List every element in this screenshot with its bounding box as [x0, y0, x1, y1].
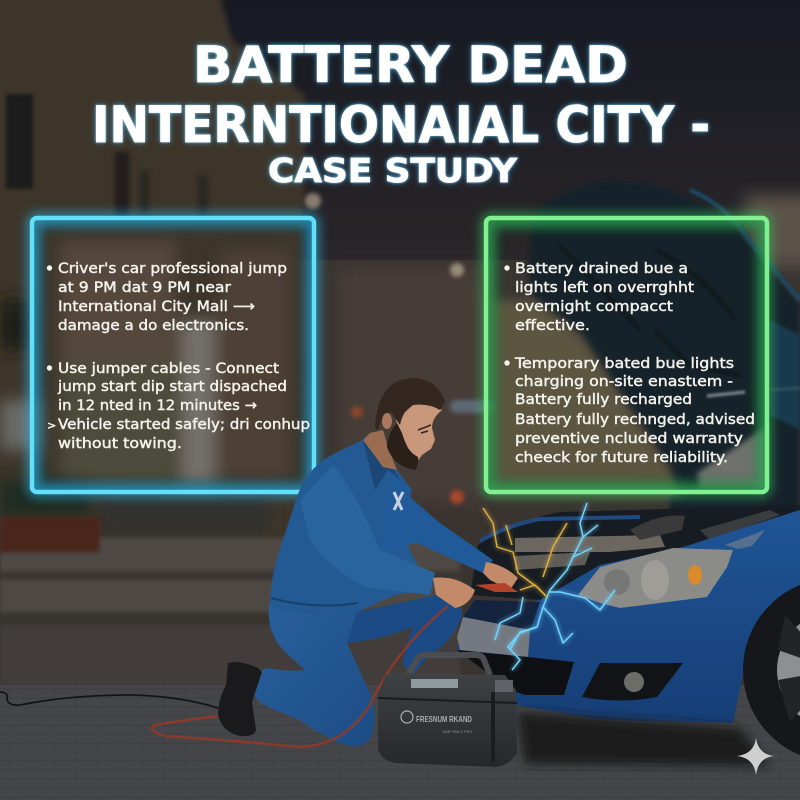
brand subtext: JUMP MULTI PRO [442, 729, 472, 734]
bumper top band [463, 600, 540, 630]
wrench badge [394, 492, 403, 510]
blue lightning [495, 503, 615, 670]
red jumper cable and clamp [152, 583, 518, 747]
bullet text: breakdown: International City Mall ⟶ [58, 299, 255, 315]
collar [363, 436, 400, 490]
boot [218, 662, 262, 736]
engine bay [470, 505, 800, 600]
bullet text: response: Use jumper cables - Connect [58, 361, 279, 377]
headlight [578, 548, 733, 608]
title: BATTERY DEAD [193, 36, 628, 94]
paving [0, 685, 800, 800]
title [92, 36, 710, 190]
bullet text: response: without towing. [58, 436, 182, 452]
bullet text: cause: Battery drained bue a [515, 261, 688, 277]
title: CASE STUDY [268, 151, 518, 190]
car [457, 505, 800, 766]
bullet text: breakdown: Criver's car professional jump [58, 261, 287, 277]
mechanic [218, 378, 518, 746]
bullet text: response: Vehicle started safely; dri conhup [58, 417, 310, 433]
bullet text: breakdown: damage a do electronics. [58, 318, 249, 334]
bullet text: breakdown [47, 261, 287, 334]
green info panel [486, 218, 767, 492]
bullet text: cause: effective. [515, 318, 590, 334]
bullet text: resolution: cheeck for future reliability. [515, 450, 728, 466]
bullet text: response: > [47, 419, 56, 432]
sparkle watermark [737, 738, 774, 775]
raised car hood [490, 181, 800, 530]
beard [387, 423, 418, 470]
electric sparks [483, 503, 615, 670]
bullet text: resolution: preventive ncluded warranty [515, 431, 743, 447]
brand text: FRESNUM RKAND [416, 714, 472, 724]
bullet text: cause: overnight compacct [515, 299, 673, 315]
bullet text: resolution: Battery fully rechnged, advised [515, 412, 755, 428]
yellow lightning [483, 508, 567, 597]
near hand [433, 578, 475, 608]
street bands [0, 517, 460, 687]
car body [457, 510, 800, 723]
far hand [483, 562, 518, 590]
fog lamp [582, 663, 683, 700]
black power cable [0, 692, 218, 708]
torso [270, 440, 430, 614]
bullet text: resolution: charging on-site enastιem - [515, 374, 733, 390]
near arm [300, 465, 435, 595]
eye and brow [418, 425, 431, 433]
far arm [382, 475, 493, 573]
portable jump starter [378, 655, 517, 767]
waist band shadow [271, 598, 358, 606]
dark lower intake [457, 650, 574, 695]
near leg [252, 600, 375, 746]
bullet text: resolution: Temporary bated bue lights [514, 356, 734, 372]
handle [408, 655, 490, 675]
front wheel [743, 578, 800, 762]
title: INTERNTIONAIAL CITY - [92, 96, 710, 154]
blurred building left [0, 0, 305, 540]
car shadow [517, 712, 770, 766]
hair [375, 378, 445, 430]
face [396, 405, 442, 462]
ear [382, 413, 392, 429]
silver bumper grille [457, 617, 530, 657]
bullet text: response: in 12 nted in 12 minutes → [58, 398, 257, 414]
bullet text: resolution: Battery fully recharged [515, 392, 692, 408]
bullet text: cause: lights left on overrghht [515, 280, 694, 296]
bullet text: response [47, 361, 310, 452]
fender highlight [725, 530, 765, 549]
brand mark [401, 711, 413, 723]
bullet text: breakdown: at 9 PM dat 9 PM near [58, 280, 231, 296]
far leg [347, 592, 463, 675]
bullet text: response: jump start dip start dispached [57, 379, 287, 395]
bullet text: cause [504, 261, 694, 334]
neck [363, 430, 397, 470]
bullet text: resolution [504, 356, 755, 466]
case [378, 673, 517, 767]
blue info panel [32, 218, 314, 492]
